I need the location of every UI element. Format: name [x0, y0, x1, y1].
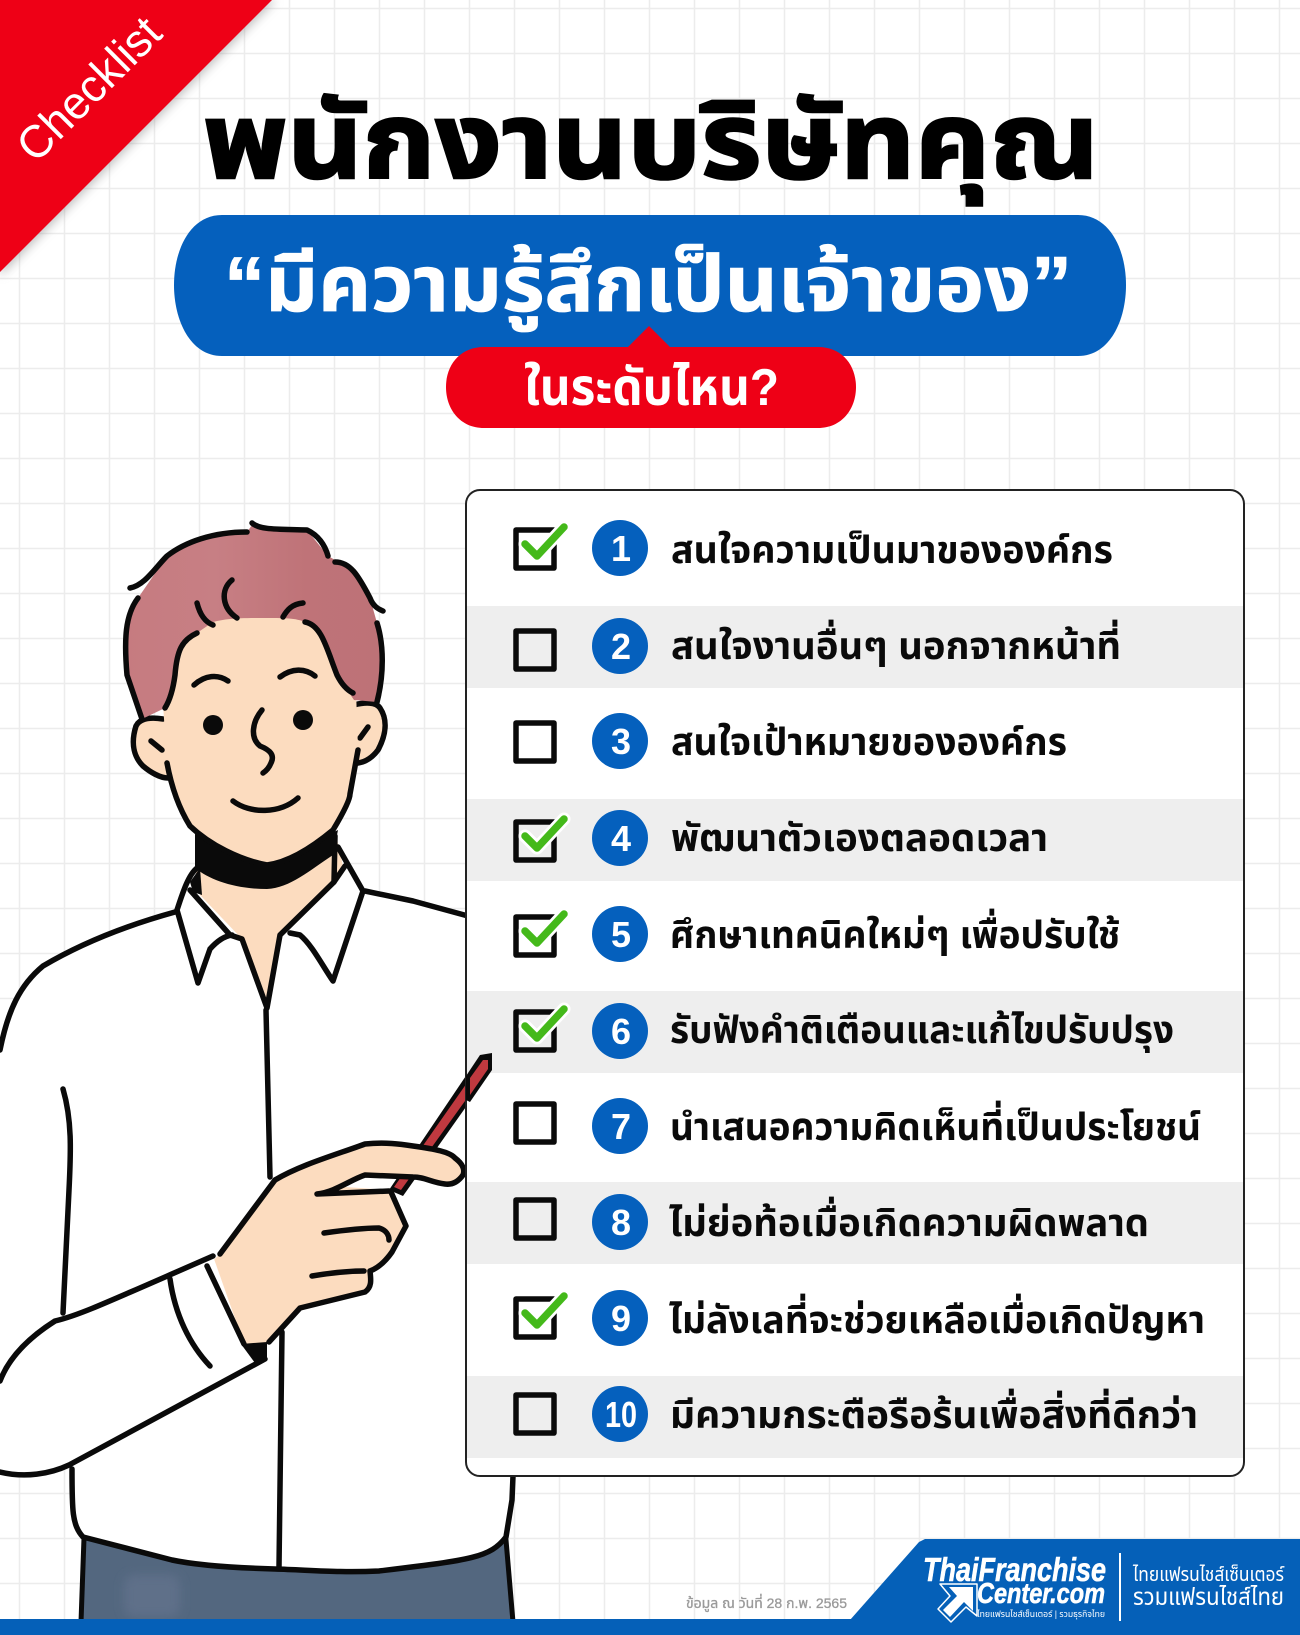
row 5: 5 [611, 914, 631, 955]
pen [389, 1053, 492, 1196]
row 3: 3 [611, 721, 631, 762]
row 10: มีความกระตือรือร้นเพื่อสิ่งที่ดีกว่า [670, 1388, 1198, 1437]
head [160, 610, 358, 865]
row 5: ศึกษาเทคนิคใหม่ๆ เพื่อปรับใช้ [670, 908, 1120, 957]
row 10 [516, 1386, 1198, 1442]
collar [177, 836, 363, 1008]
index finger [300, 1143, 464, 1195]
sleeve [0, 1256, 265, 1475]
row 7 [516, 1098, 1201, 1154]
row 5 [516, 906, 1120, 962]
row 9: ไม่ลังเลที่จะช่วยเหลือเมื่อเกิดปัญหา [669, 1293, 1205, 1342]
row 2 [516, 618, 1121, 674]
row 4: 4 [611, 818, 631, 859]
title: พนักงานบริษัทคุณ [203, 83, 1099, 206]
neck [195, 830, 343, 1008]
row 7: 7 [611, 1106, 631, 1147]
logo wordmark: ThaiFranchise [923, 1551, 1106, 1588]
row 6: 6 [611, 1011, 631, 1052]
row 1: สนใจความเป็นมาขององค์กร [671, 530, 1113, 572]
illustration: man in white shirt [0, 523, 513, 1622]
corner ribbon: Checklist: Checklist [6, 6, 172, 171]
row 8 [516, 1194, 1149, 1250]
corner ribbon: Checklist [0, 0, 276, 276]
row 1: 1 [611, 528, 631, 569]
row 1 [516, 520, 1113, 576]
row 3: สนใจเป้าหมายขององค์กร [671, 722, 1067, 764]
hair [125, 523, 383, 719]
footer bar and logo: รวมแฟรนไชส์ไทย [1133, 1584, 1284, 1611]
row 8: 8 [611, 1202, 631, 1243]
footer bar and logo: ไทยแฟรนไชส์เซ็นเตอร์ | รวมธุรกิจไทย [976, 1609, 1105, 1619]
trousers [81, 1538, 513, 1622]
row 2: 2 [611, 626, 631, 667]
red sub-headline pill: ในระดับไหน? [524, 359, 779, 417]
row 7: นำเสนอความคิดเห็นที่เป็นประโยชน์ [670, 1100, 1201, 1149]
row 10: 10 [605, 1394, 637, 1435]
footer bar and logo: Center.com [977, 1578, 1105, 1610]
footer bar and logo [0, 1539, 1300, 1635]
row 4: พัฒนาตัวเองตลอดเวลา [671, 818, 1048, 860]
row 6 [516, 1003, 1174, 1059]
blue headline pill [174, 215, 1126, 356]
row 8: ไม่ย่อท้อเมื่อเกิดความผิดพลาด [669, 1196, 1149, 1245]
ears [133, 703, 385, 780]
row 2: สนใจงานอื่นๆ นอกจากหน้าที่ [671, 619, 1121, 668]
row 6: รับฟังคำติเตือนและแก้ไขปรับปรุง [670, 1010, 1174, 1053]
face details [194, 670, 315, 810]
row 3 [516, 713, 1067, 769]
red sub-headline pill [446, 326, 856, 428]
shirt body [0, 860, 513, 1571]
row 9 [516, 1290, 1205, 1346]
source note: ข้อมูล ณ วันที่ 28 ก.พ. 2565 [686, 1593, 847, 1612]
checklist card [466, 490, 1244, 1476]
row 4 [516, 810, 1048, 866]
blue headline pill: “มีความรู้สึกเป็นเจ้าของ” [224, 240, 1072, 332]
pen tip over card [466, 1053, 492, 1102]
hand [207, 1143, 464, 1344]
row 9: 9 [611, 1298, 631, 1339]
logo arrow [938, 1584, 977, 1622]
